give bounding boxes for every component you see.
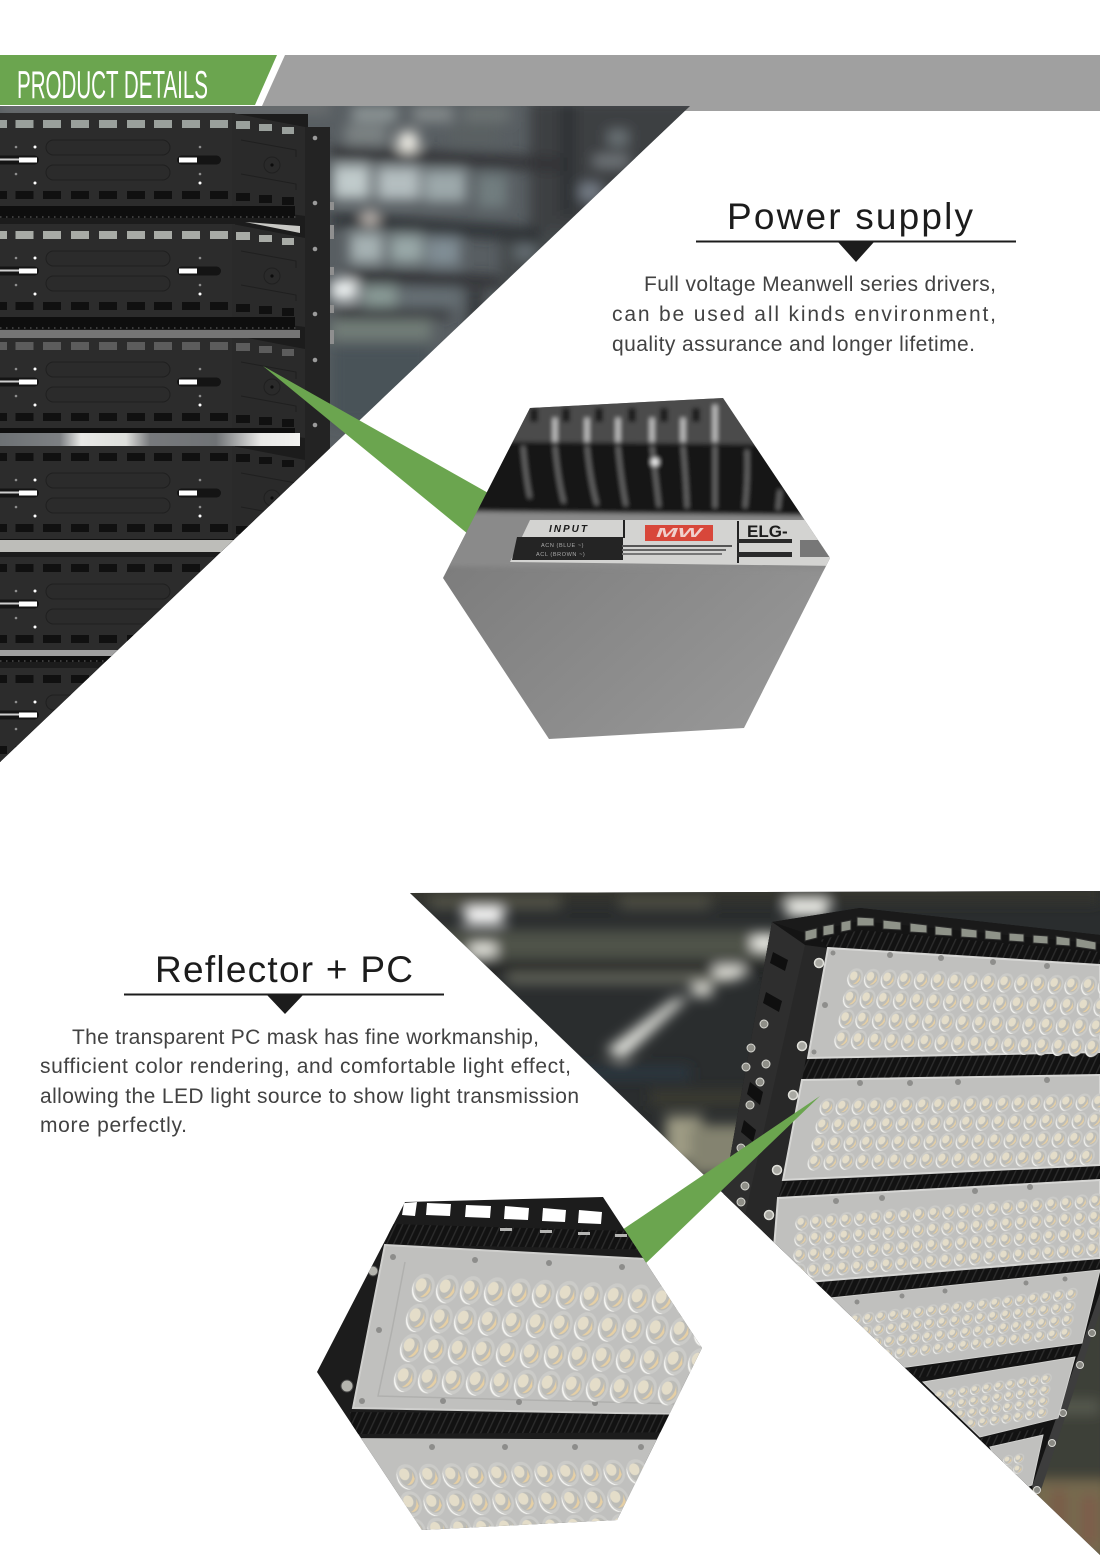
power supply label: ACL (BROWN ~)	[536, 552, 585, 558]
text block: power supply description	[612, 273, 996, 356]
hexagon detail: LED lens close-up	[317, 1197, 702, 1530]
green header tab	[0, 55, 277, 105]
text block: reflector description	[40, 1026, 579, 1137]
header band	[0, 55, 1100, 111]
hexagon detail: driver close-up	[440, 395, 840, 745]
text block: power supply description: quality assurance and longer lifetime.	[612, 333, 975, 356]
LED module 6	[990, 1435, 1043, 1492]
arrow: green pointer to power supply detail	[263, 366, 490, 534]
heading: reflector + PC	[124, 949, 444, 1014]
text block: reflector description: allowing the LED light source to show light transmission	[40, 1085, 579, 1108]
panel: power supply photo triangle	[0, 100, 700, 773]
section title: PRODUCT DETAILS	[17, 64, 208, 107]
power supply label	[510, 520, 840, 566]
text block: reflector description: more perfectly.	[40, 1114, 187, 1137]
LED module 2	[783, 1075, 1100, 1180]
power supply label: ELG-	[747, 522, 788, 541]
power supply label: MW	[656, 525, 705, 540]
power supply label: ACN (BLUE ~)	[541, 543, 584, 549]
LED module 1	[808, 948, 1100, 1058]
text block: power supply description: can be used all kinds environment,	[612, 303, 996, 326]
text block: power supply description: Full voltage Meanwell series drivers,	[644, 273, 996, 296]
LED module 4	[830, 1270, 1100, 1370]
heading marker triangle	[838, 242, 874, 262]
arrow: green pointer to reflector detail	[622, 1096, 820, 1264]
grey header bar	[262, 55, 1100, 111]
text block: reflector description: The transparent PC mask has fine workmanship,	[72, 1026, 539, 1049]
panel: reflector photo triangle	[400, 885, 1100, 1555]
LED module 5	[923, 1357, 1075, 1437]
heading marker triangle	[267, 995, 303, 1014]
blurred factory roof background	[0, 100, 700, 770]
heading: reflector + PC: Reflector + PC	[155, 949, 413, 990]
dark floodlight back, six stacked modules	[0, 113, 334, 773]
power supply label: INPUT	[549, 524, 589, 535]
heading: power supply	[696, 196, 1016, 262]
text block: reflector description: sufficient color rendering, and comfortable light effect,	[40, 1055, 571, 1078]
blurred warehouse background	[400, 885, 1100, 1555]
floodlight frame	[723, 908, 1100, 1494]
heading: power supply: Power supply	[727, 196, 974, 237]
LED module 3	[771, 1180, 1100, 1285]
